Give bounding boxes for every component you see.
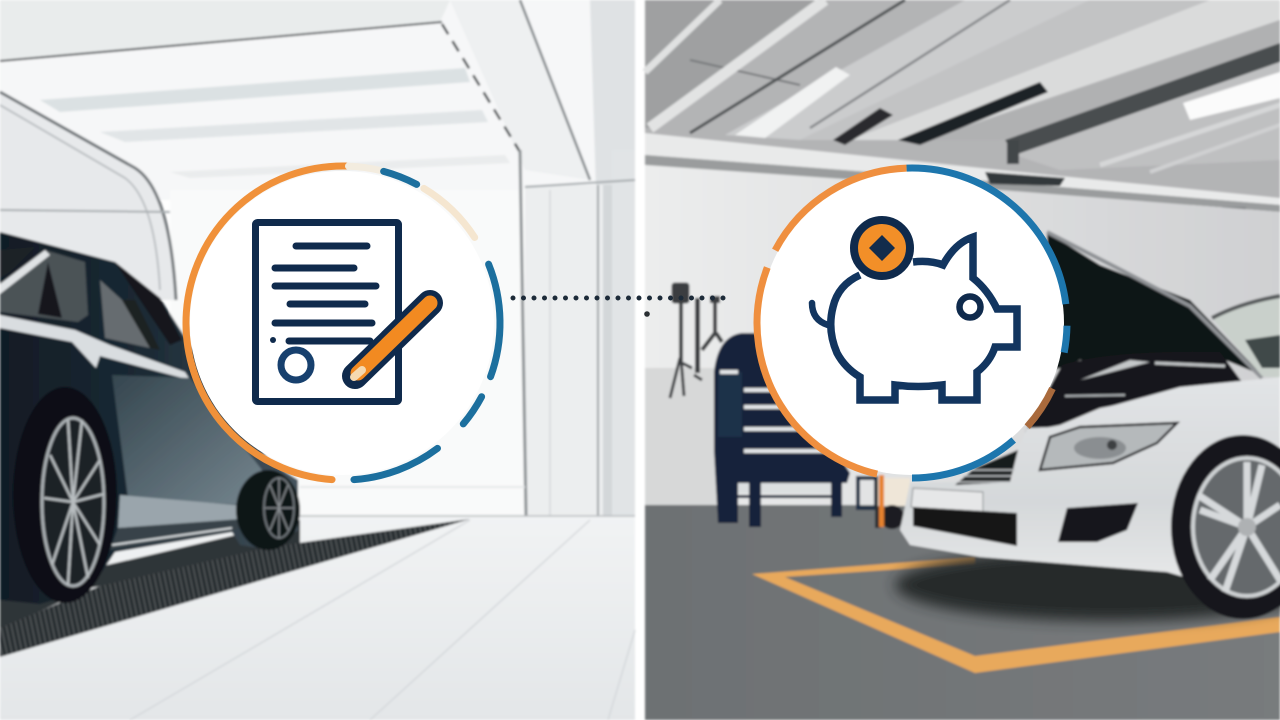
workshop wall	[645, 165, 1280, 510]
hanging tools	[670, 283, 722, 398]
open hood	[1047, 232, 1262, 375]
door panel	[112, 375, 262, 505]
icon: piggy bank	[812, 220, 1017, 400]
back wall and door columns	[170, 150, 635, 516]
segmented ring	[123, 103, 563, 543]
engine bay	[1025, 352, 1242, 432]
tool cart	[714, 333, 910, 529]
grille	[955, 450, 1018, 485]
hood edge	[1047, 232, 1262, 378]
segmented ring	[693, 104, 1131, 542]
dotted connector	[513, 298, 733, 317]
badge: contract document	[123, 103, 563, 543]
front wheel	[13, 387, 117, 603]
eye	[960, 296, 980, 318]
panel: dark workshop photo	[645, 0, 1280, 720]
tail	[812, 303, 828, 325]
windows	[0, 247, 35, 278]
car shadow	[895, 549, 1280, 621]
badge: piggy bank savings	[693, 104, 1131, 542]
parking lines	[752, 557, 1280, 673]
pencil	[354, 303, 430, 377]
chrome body line	[0, 315, 190, 380]
car wheel	[1171, 435, 1280, 619]
tent frame behind car	[0, 92, 176, 300]
fog light vent	[1058, 503, 1138, 542]
coin	[854, 220, 910, 276]
lower vent	[913, 507, 1017, 546]
white floor	[0, 517, 635, 720]
garage ceiling	[0, 0, 635, 200]
icon: document with pencil	[256, 222, 430, 402]
workshop floor	[645, 505, 1280, 720]
dark car	[0, 232, 300, 604]
floor grating	[0, 519, 470, 657]
cross beam	[645, 133, 1280, 219]
car shadow	[0, 520, 300, 630]
wall cabinet	[645, 368, 717, 506]
panel: white garage photo	[0, 0, 635, 720]
rear wheel	[236, 470, 300, 550]
workshop ceiling	[645, 0, 1280, 205]
white car	[900, 377, 1280, 619]
windshield	[1212, 296, 1280, 378]
number plate	[911, 488, 983, 518]
white disc	[760, 171, 1064, 475]
headlight	[1040, 423, 1177, 470]
white disc	[190, 171, 494, 475]
